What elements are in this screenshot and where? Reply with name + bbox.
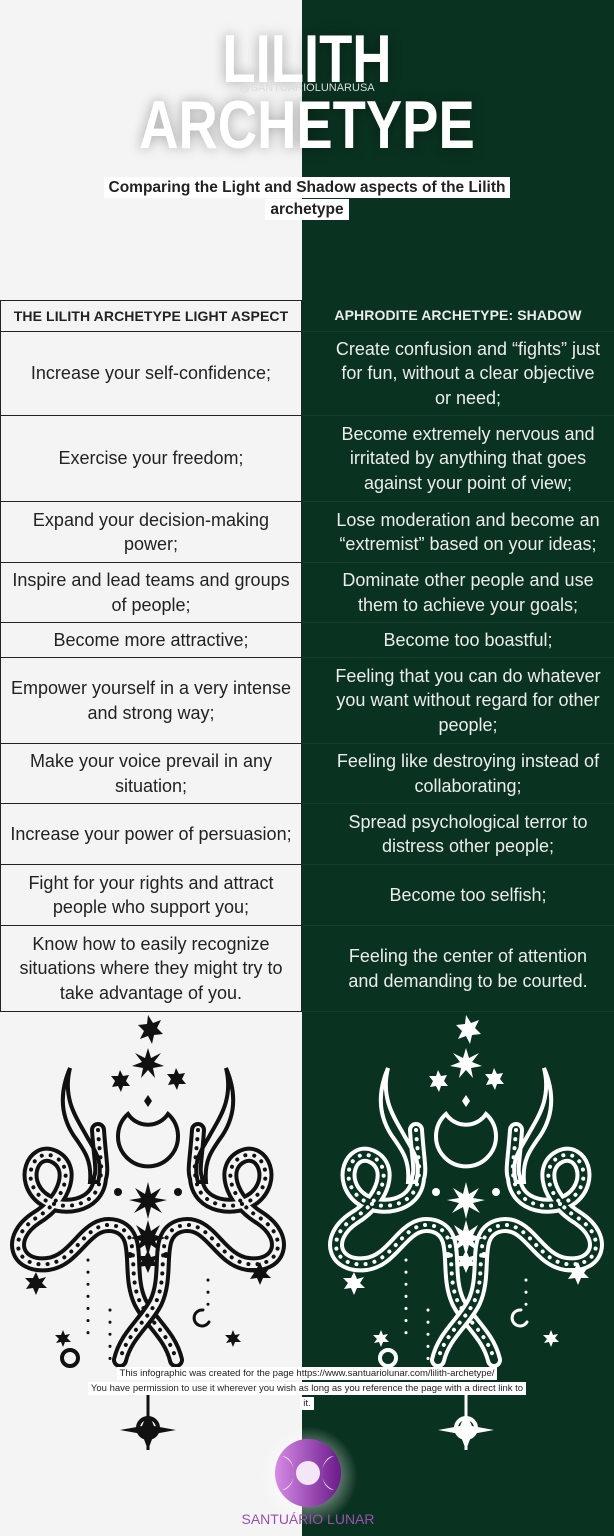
right symbol (white) bbox=[336, 1015, 596, 1462]
row 7: Feeling like destroying instead of collaborating; bbox=[337, 751, 599, 796]
row 2: Become extremely nervous and irritated by anything that goes against your point of view; bbox=[341, 424, 595, 493]
row 2 bbox=[0, 416, 614, 502]
comparison table bbox=[0, 300, 614, 1012]
logo bbox=[241, 1428, 375, 1527]
row 8: Spread psychological terror to distress other people; bbox=[348, 812, 588, 856]
row 10: Feeling the center of attention and demanding to be courted. bbox=[348, 946, 588, 990]
row 2: Exercise your freedom; bbox=[58, 448, 244, 468]
row 1: Create confusion and “fights” just for fun, without a clear objective or need; bbox=[336, 339, 600, 408]
logo glow bbox=[258, 1426, 358, 1526]
row 4: Inspire and lead teams and groups of people; bbox=[12, 570, 290, 614]
row 8: Increase your power of persuasion; bbox=[10, 824, 292, 844]
table header: THE LILITH ARCHETYPE LIGHT ASPECT bbox=[14, 308, 288, 324]
decorative lilith symbols bbox=[10, 1015, 604, 1450]
row 3: Expand your decision-making power; bbox=[33, 510, 269, 554]
row 10 bbox=[0, 926, 614, 1012]
row 9: Become too selfish; bbox=[389, 885, 547, 905]
title: ARCHETYPE bbox=[139, 87, 475, 163]
logo text: SANTUÁRIO LUNAR bbox=[241, 1511, 375, 1527]
row 3 bbox=[0, 502, 614, 563]
row 9: Fight for your rights and attract people who support you; bbox=[28, 872, 274, 917]
row 5: Become too boastful; bbox=[383, 630, 553, 650]
row 7: Make your voice prevail in any situation; bbox=[30, 751, 272, 796]
logo circle bbox=[275, 1439, 341, 1507]
row 4: Dominate other people and use them to achieve your goals; bbox=[342, 570, 594, 614]
table header bbox=[0, 300, 614, 332]
row 1: Increase your self-confidence; bbox=[31, 363, 271, 383]
footer attribution note bbox=[88, 1367, 526, 1410]
footer attribution note: it. bbox=[303, 1398, 311, 1409]
row 3: Lose moderation and become an “extremist” based on your ideas; bbox=[336, 510, 600, 554]
row 6: Empower yourself in a very intense and strong way; bbox=[11, 678, 291, 722]
row 6 bbox=[0, 658, 614, 744]
footer attribution note: This infographic was created for the page https://www.santuariolunar.com/lilith-archetype/ bbox=[120, 1368, 494, 1379]
table header: APHRODITE ARCHETYPE: SHADOW bbox=[334, 307, 582, 323]
row 4 bbox=[0, 563, 614, 623]
handle: @SANTUARIOLUNARUSA bbox=[239, 82, 375, 94]
row 8 bbox=[0, 804, 614, 865]
title bbox=[136, 21, 475, 163]
footer attribution note: You have permission to use it wherever you wish as long as you reference the page with a direct link to bbox=[91, 1383, 523, 1394]
row 1 bbox=[0, 332, 614, 416]
row 6: Feeling that you can do whatever you want without regard for other people; bbox=[335, 666, 601, 735]
row 7 bbox=[0, 744, 614, 804]
left symbol (black) bbox=[18, 1015, 278, 1462]
title: LILITH bbox=[222, 21, 392, 97]
row 10: Know how to easily recognize situations where they might try to take advantage of you. bbox=[19, 934, 283, 1003]
row 5 bbox=[0, 623, 614, 658]
row 9 bbox=[0, 865, 614, 926]
subtitle: Comparing the Light and Shadow aspects of the Lilith archetype bbox=[108, 179, 505, 218]
row 5: Become more attractive; bbox=[53, 630, 249, 650]
